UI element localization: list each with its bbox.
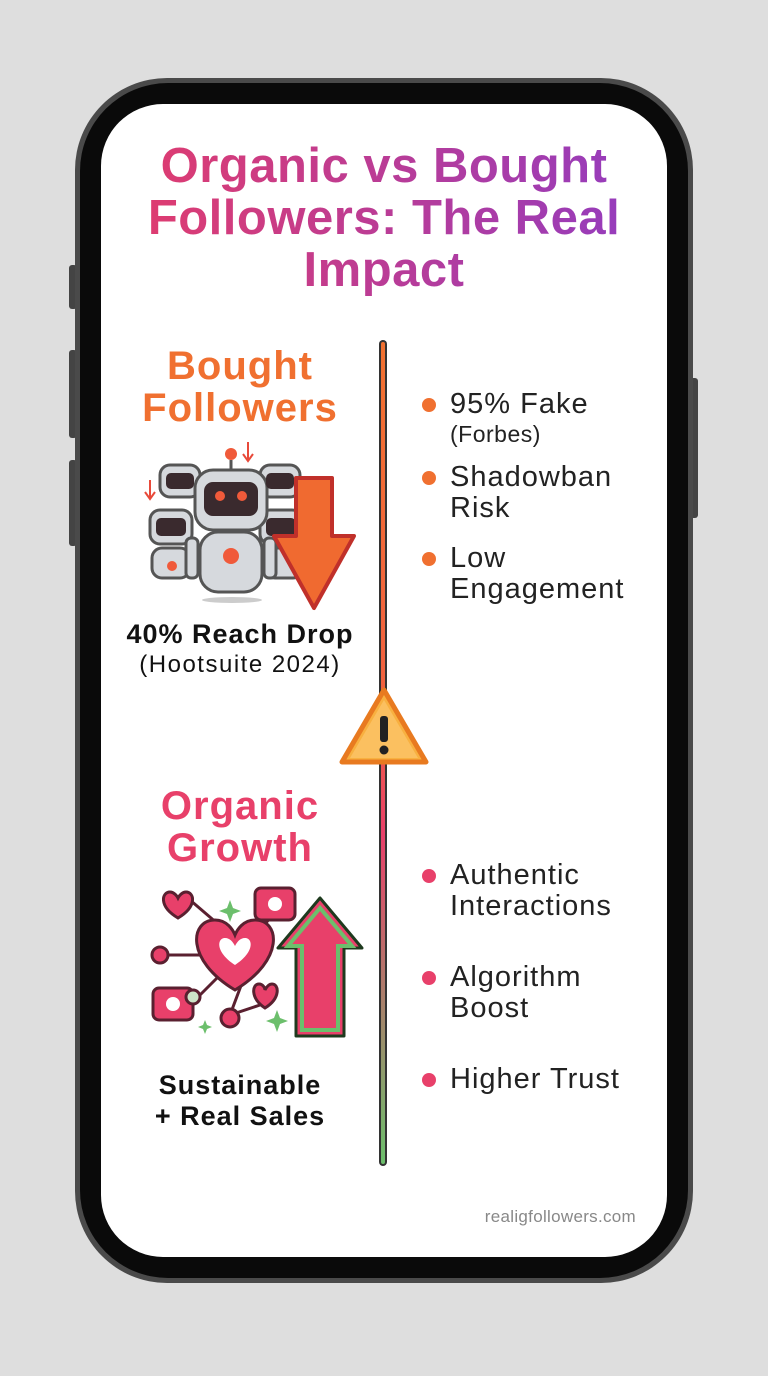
heading: bought followers: Followers	[142, 386, 338, 430]
heading: organic growth: Organic	[161, 784, 319, 828]
bullet: engagement	[422, 542, 624, 605]
bullet: engagement: Engagement	[450, 573, 624, 605]
bullet: shadowban: Shadowban	[450, 461, 612, 493]
bullet: shadowban	[422, 461, 612, 524]
stat: reach drop: (Hootsuite 2024)	[139, 651, 341, 678]
bullet: algorithm: Algorithm	[450, 961, 582, 993]
title: Impact	[304, 243, 464, 297]
bullet: fake: 95% Fake	[450, 388, 589, 420]
timeline line	[379, 340, 387, 1166]
bullet: shadowban: Risk	[450, 492, 510, 524]
title: Followers: The Real	[148, 191, 620, 245]
stat: sustainable sales	[155, 1070, 325, 1131]
bullet: engagement: Low	[450, 542, 506, 574]
title	[91, 140, 677, 296]
bullet: authentic: Interactions	[450, 890, 612, 922]
title: Organic vs Bought	[161, 139, 607, 193]
bullet: authentic	[422, 859, 612, 922]
bullet: algorithm	[422, 961, 582, 1024]
bullets: bought	[422, 388, 624, 605]
bullet: authentic: Authentic	[450, 859, 580, 891]
bullet: trust: Higher Trust	[450, 1063, 620, 1095]
heading: organic growth	[161, 784, 319, 870]
heading: bought followers: Bought	[167, 344, 313, 388]
bullet: algorithm: Boost	[450, 992, 529, 1024]
icon: hearts network with up arrow	[150, 886, 364, 1038]
heading: bought followers	[142, 344, 338, 430]
stat: reach drop: 40% Reach Drop	[126, 619, 354, 649]
bullets: organic	[422, 859, 620, 1095]
stat: reach drop	[126, 619, 354, 678]
bullet: fake: (Forbes)	[450, 421, 541, 447]
stat: sustainable sales: + Real Sales	[155, 1101, 325, 1131]
heading: organic growth: Growth	[167, 826, 313, 870]
stat: sustainable sales: Sustainable	[159, 1070, 321, 1100]
footer url: realigfollowers.com	[485, 1207, 636, 1226]
icon: warning triangle	[340, 688, 428, 764]
bullet: fake	[422, 388, 589, 447]
icon: robots with down arrow	[144, 442, 356, 610]
